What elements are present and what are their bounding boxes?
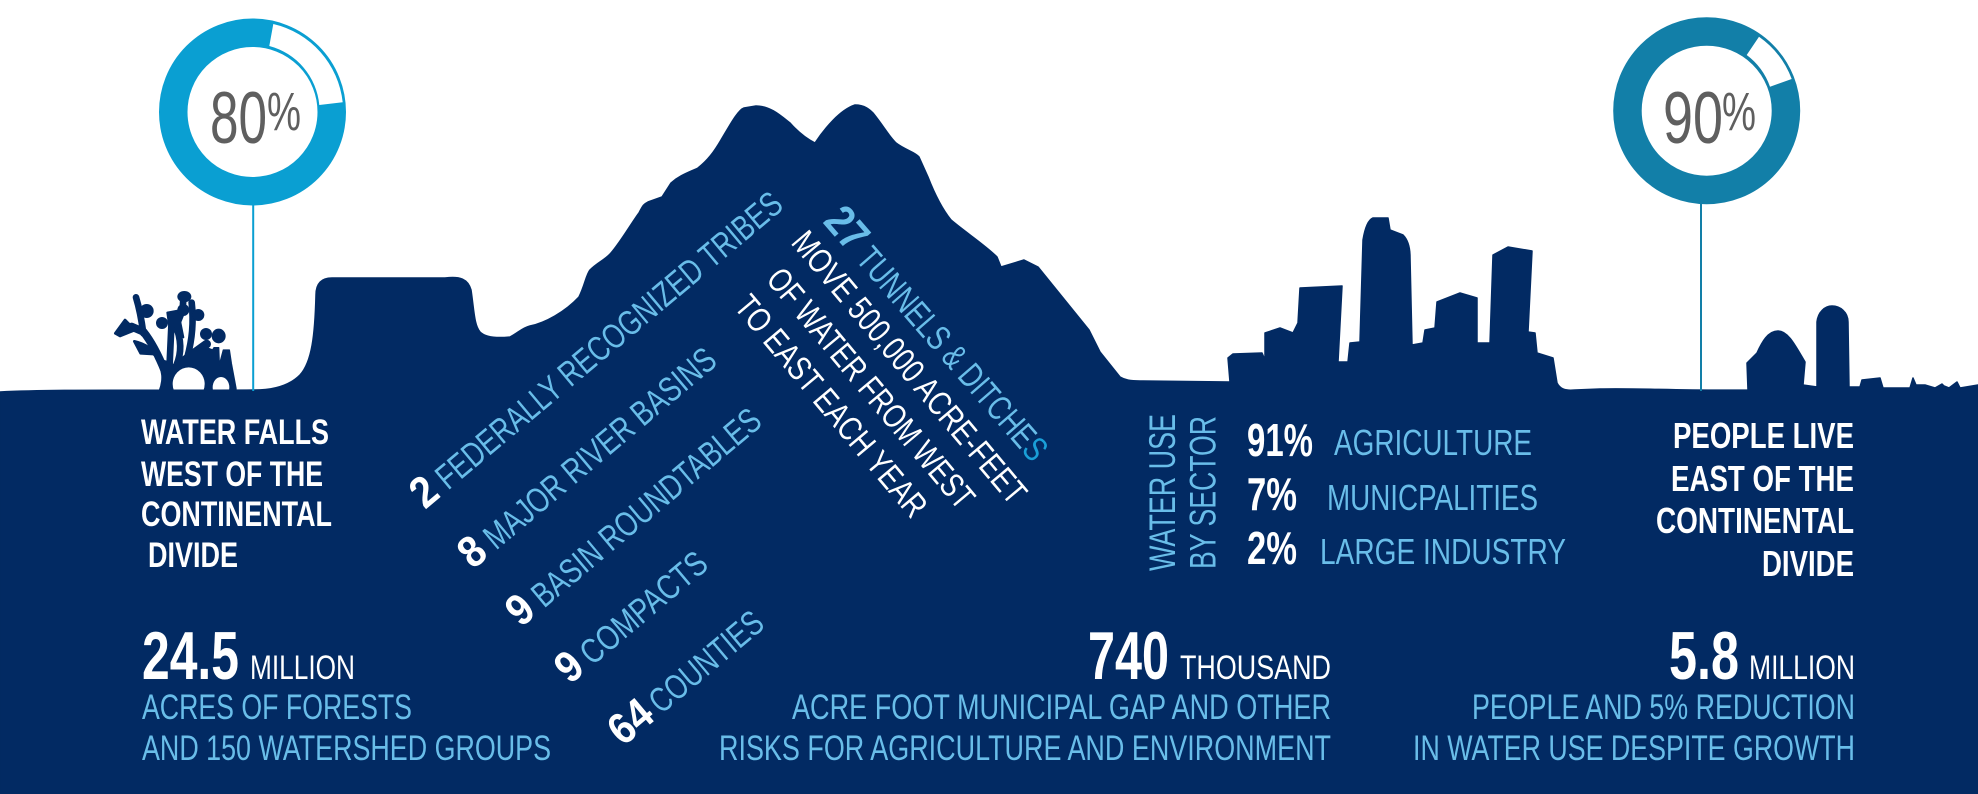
text: water falls west [141, 413, 332, 575]
diagonal list: left side of the mountain [400, 178, 791, 755]
stat: 8 major river basins: 8 [448, 526, 496, 578]
stat: 9 basin roundtables: 9 [496, 584, 544, 636]
stat: 24.5 million acres [142, 618, 551, 768]
text: people live east: EAST OF THE [1671, 458, 1854, 499]
stat: 5.8 million: PEOPLE AND 5% REDUCTION [1472, 688, 1855, 727]
stat: 24.5 million acres: 24.5 [142, 618, 239, 694]
text: of water from west: OF WATER FROM WEST [759, 261, 982, 516]
stat: 2 federally recognized tribes [400, 178, 791, 518]
vertical heading: water use by sector: BY SECTOR [1182, 416, 1224, 569]
row: large industry [1247, 522, 1566, 574]
stat: 27 tunnels and ditches: 27 [814, 196, 879, 260]
stat: 27 tunnels and ditches [814, 196, 1061, 470]
row: agriculture: 91% [1247, 414, 1313, 466]
stat: 8 major river basins: MAJOR RIVER BASINS [476, 340, 724, 557]
text: people live east: DIVIDE [1762, 543, 1854, 584]
row: large industry: 2% [1247, 522, 1297, 574]
stat: 27 tunnels and ditches: TUNNELS & DITCHES [849, 239, 1055, 469]
text: move 500,000 acre-feet: MOVE 500,000 ACRE-FEET [784, 224, 1034, 512]
row: municipalities: 7% [1247, 468, 1297, 520]
stat: 9 basin roundtables [496, 394, 770, 636]
stat: 9 basin roundtables: BASIN ROUNDTABLES [524, 400, 769, 615]
icon: joshua tree [115, 291, 236, 401]
stat: 24.5 million acres: AND 150 WATERSHED GROUPS [142, 729, 551, 768]
stat: 5.8 million: 5.8 [1669, 618, 1739, 694]
vertical heading: water use by sector: WATER USE [1142, 414, 1183, 571]
stat: 5.8 million: MILLION [1749, 649, 1855, 687]
stat: 5.8 million: IN WATER USE DESPITE GROWTH [1413, 729, 1855, 768]
stat: 740 thousand: THOUSAND [1180, 649, 1331, 687]
row: large industry: LARGE INDUSTRY [1320, 531, 1566, 572]
stat: 64 counties [598, 597, 773, 755]
donut: 90 percent east [1627, 31, 1792, 391]
row: municipalities [1247, 468, 1538, 520]
donut: 80 percent west [173, 24, 343, 391]
text: people live east: PEOPLE LIVE [1673, 415, 1854, 456]
stat: 2 federally recognized tribes: 2 [400, 466, 448, 518]
stat: 9 compacts: 9 [545, 641, 593, 693]
stat: 5.8 million [1413, 618, 1855, 768]
text: water falls west: WEST OF THE [141, 455, 323, 494]
donut: 80 percent west: 80 [210, 78, 267, 159]
text: people live east: CONTINENTAL [1656, 500, 1854, 541]
stat: 24.5 million acres: ACRES OF FORESTS [142, 688, 412, 727]
donut: 80 percent west: % [267, 82, 301, 142]
panel: water use by sector [1142, 414, 1566, 574]
vertical heading: water use by sector [1142, 414, 1224, 571]
text: to east each year: TO EAST EACH YEAR [727, 288, 935, 525]
row: agriculture [1247, 414, 1532, 466]
stat: 9 compacts: COMPACTS [572, 544, 715, 672]
text: water falls west: WATER FALLS [141, 413, 329, 452]
text: water falls west: DIVIDE [148, 536, 238, 575]
row: agriculture: AGRICULTURE [1334, 422, 1532, 463]
donut: 90 percent east: 90 [1663, 78, 1723, 159]
diagonal block: tunnels and ditches [727, 196, 1061, 525]
stat: 2 federally recognized tribes: FEDERALLY RECOGNIZED TRIBES [428, 184, 790, 497]
text: water falls west: CONTINENTAL [141, 495, 332, 534]
stat: 9 compacts [545, 537, 717, 693]
donut: 90 percent east: % [1722, 82, 1756, 142]
stat: 740 thousand [719, 618, 1331, 768]
stat: 740 thousand: RISKS FOR AGRICULTURE AND ENVIRONMENT [719, 729, 1331, 768]
stat: 64 counties: 64 [598, 689, 663, 755]
stat: 740 thousand: ACRE FOOT MUNICIPAL GAP AND OTHER [792, 688, 1331, 727]
stat: 8 major river basins [448, 334, 725, 578]
stat: 64 counties: COUNTIES [641, 603, 771, 721]
stat: 740 thousand: 740 [1088, 618, 1169, 694]
stat: 24.5 million acres: MILLION [250, 649, 355, 687]
text: people live east [1656, 415, 1854, 584]
row: municipalities: MUNICPALITIES [1327, 477, 1538, 518]
